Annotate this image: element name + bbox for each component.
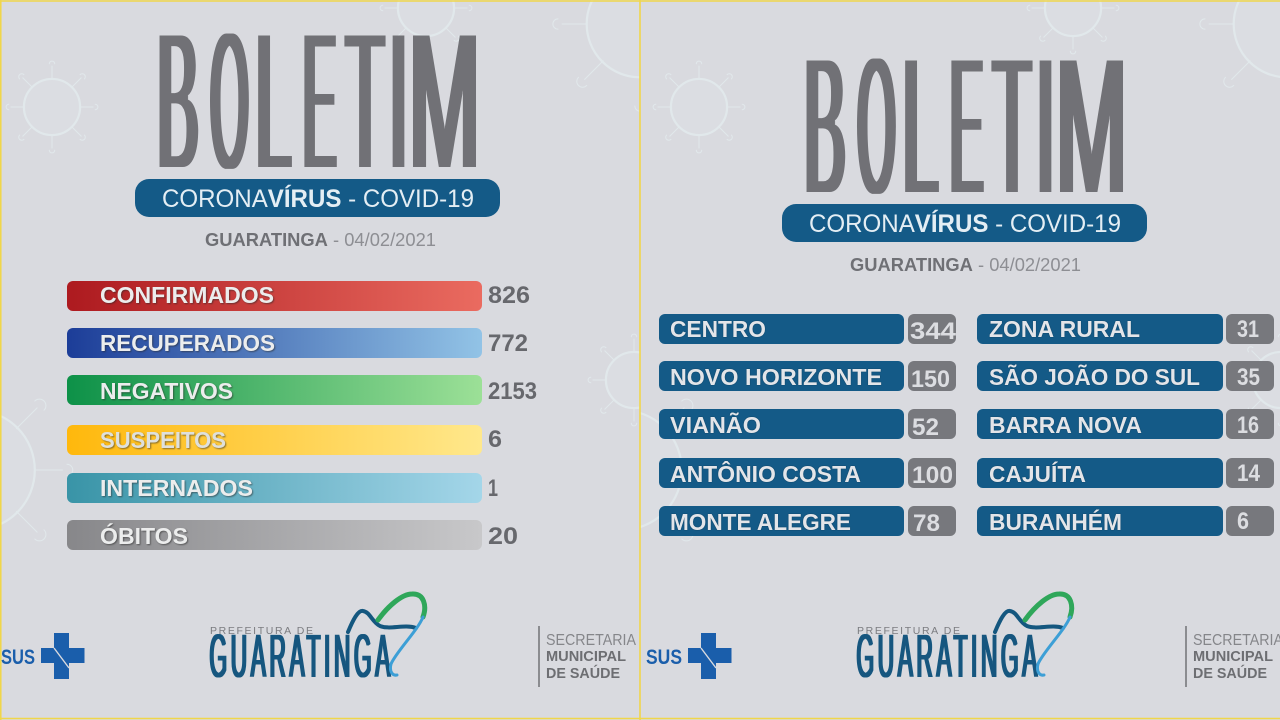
title: BOLETIM [804,16,1127,236]
panel: right bulletin by neighbourhood [641,2,1280,687]
row: Zona Rural: ZONA RURAL [989,316,1140,342]
logo: SUS [1,633,84,679]
row: suspeitos: SUSPEITOS [100,427,226,453]
row: internados: INTERNADOS [100,475,253,501]
row: negativos: 2153 [488,378,537,405]
title: BOLETIM: T [993,16,1031,236]
subtitle pill [135,179,500,217]
row: óbitos: 20 [488,523,518,550]
location and date: GUARATINGA - 04/02/2021 [850,255,1081,275]
row: Monte Alegre: MONTE ALEGRE [670,509,851,535]
row: São João do Sul: 35 [1237,364,1260,391]
row: Barra Nova [977,409,1274,439]
row: Vianão: 52 [912,414,939,441]
row: Zona Rural [977,314,1274,344]
row: Novo Horizonte: 150 [911,366,950,393]
row: confirmados: 826 [488,282,530,309]
row: Centro: 344 [910,318,957,345]
row: recuperados: 772 [488,330,528,357]
row: Buranhém: BURANHÉM [989,508,1122,535]
logo: Secretaria Municipal de Saúde: DE SAÚDE [546,664,620,682]
virus background decoration, left panel [0,0,727,568]
logo: Secretaria Municipal de Saúde [538,626,637,687]
row: suspeitos [67,425,502,455]
logo: Prefeitura de Guaratinga [856,594,1072,690]
row: Monte Alegre: 78 [913,510,940,537]
logo: SUS [646,633,732,679]
row: Cajuíta: 14 [1237,460,1261,487]
row: Barra Nova: BARRA NOVA [989,412,1142,438]
row: Cajuíta: CAJUÍTA [989,460,1086,487]
row: São João do Sul [977,361,1274,391]
row: confirmados: CONFIRMADOS [100,282,274,308]
row: negativos [67,375,537,405]
row: recuperados [67,328,528,358]
row: óbitos [67,520,518,550]
row: Monte Alegre [659,506,956,537]
title: BOLETIM: O [858,16,895,236]
row: Cajuíta [977,458,1274,488]
logo: Prefeitura de Guaratinga [210,594,425,690]
logo: Prefeitura de Guaratinga: GUARATINGA [210,621,394,690]
row: Buranhém: 6 [1237,508,1249,535]
row: Centro: CENTRO [670,316,766,342]
logo: Secretaria Municipal de Saúde: MUNICIPAL [1193,649,1273,665]
row: Barra Nova: 16 [1237,412,1259,439]
row: recuperados: RECUPERADOS [100,330,275,356]
title: BOLETIM: B [804,16,846,236]
subtitle pill: CORONAVÍRUS - COVID-19 [162,184,474,213]
title: BOLETIM: E [950,16,983,236]
row: suspeitos: 6 [488,426,502,453]
title: BOLETIM: L [903,16,938,236]
logo: Secretaria Municipal de Saúde: MUNICIPAL [546,649,626,665]
subtitle pill [782,204,1147,242]
row: Novo Horizonte [659,361,956,393]
logo: Prefeitura de Guaratinga: GUARATINGA [856,621,1041,690]
logo: SUS: SUS [646,646,682,669]
panel: right bulletin by neighbourhood: M [1056,16,1127,236]
logo: Secretaria Municipal de Saúde: DE SAÚDE [1193,664,1267,682]
row: Vianão [659,409,956,441]
title: BOLETIM: I [1037,16,1054,236]
row: internados: 1 [488,475,498,502]
row: óbitos: ÓBITOS [100,522,188,549]
virus background decoration, right panel [641,2,1280,542]
title: BOLETIM [158,0,480,211]
row: Antônio Costa: 100 [912,462,953,489]
logo: SUS: SUS [1,646,35,669]
row: confirmados [67,281,530,311]
row: São João do Sul: SÃO JOÃO DO SUL [989,363,1200,390]
row: Antônio Costa [659,458,956,489]
row: Novo Horizonte: NOVO HORIZONTE [670,364,882,390]
logo: Prefeitura de Guaratinga: PREFEITURA DE [857,625,960,637]
row: Zona Rural: 31 [1237,316,1259,343]
panel: left bulletin summary [2,2,639,687]
row: negativos: NEGATIVOS [100,378,233,404]
logo: Secretaria Municipal de Saúde: SECRETARIA [546,632,637,649]
logo: Prefeitura de Guaratinga: PREFEITURA DE [210,625,313,637]
row: internados [67,473,498,503]
row: Vianão: VIANÃO [670,411,761,438]
row: Centro [659,314,957,345]
location and date: GUARATINGA - 04/02/2021 [205,230,436,250]
logo: Secretaria Municipal de Saúde [1185,626,1280,687]
row: Buranhém [977,506,1274,536]
subtitle pill: CORONAVÍRUS - COVID-19 [809,209,1121,238]
row: Antônio Costa: ANTÔNIO COSTA [670,460,861,487]
